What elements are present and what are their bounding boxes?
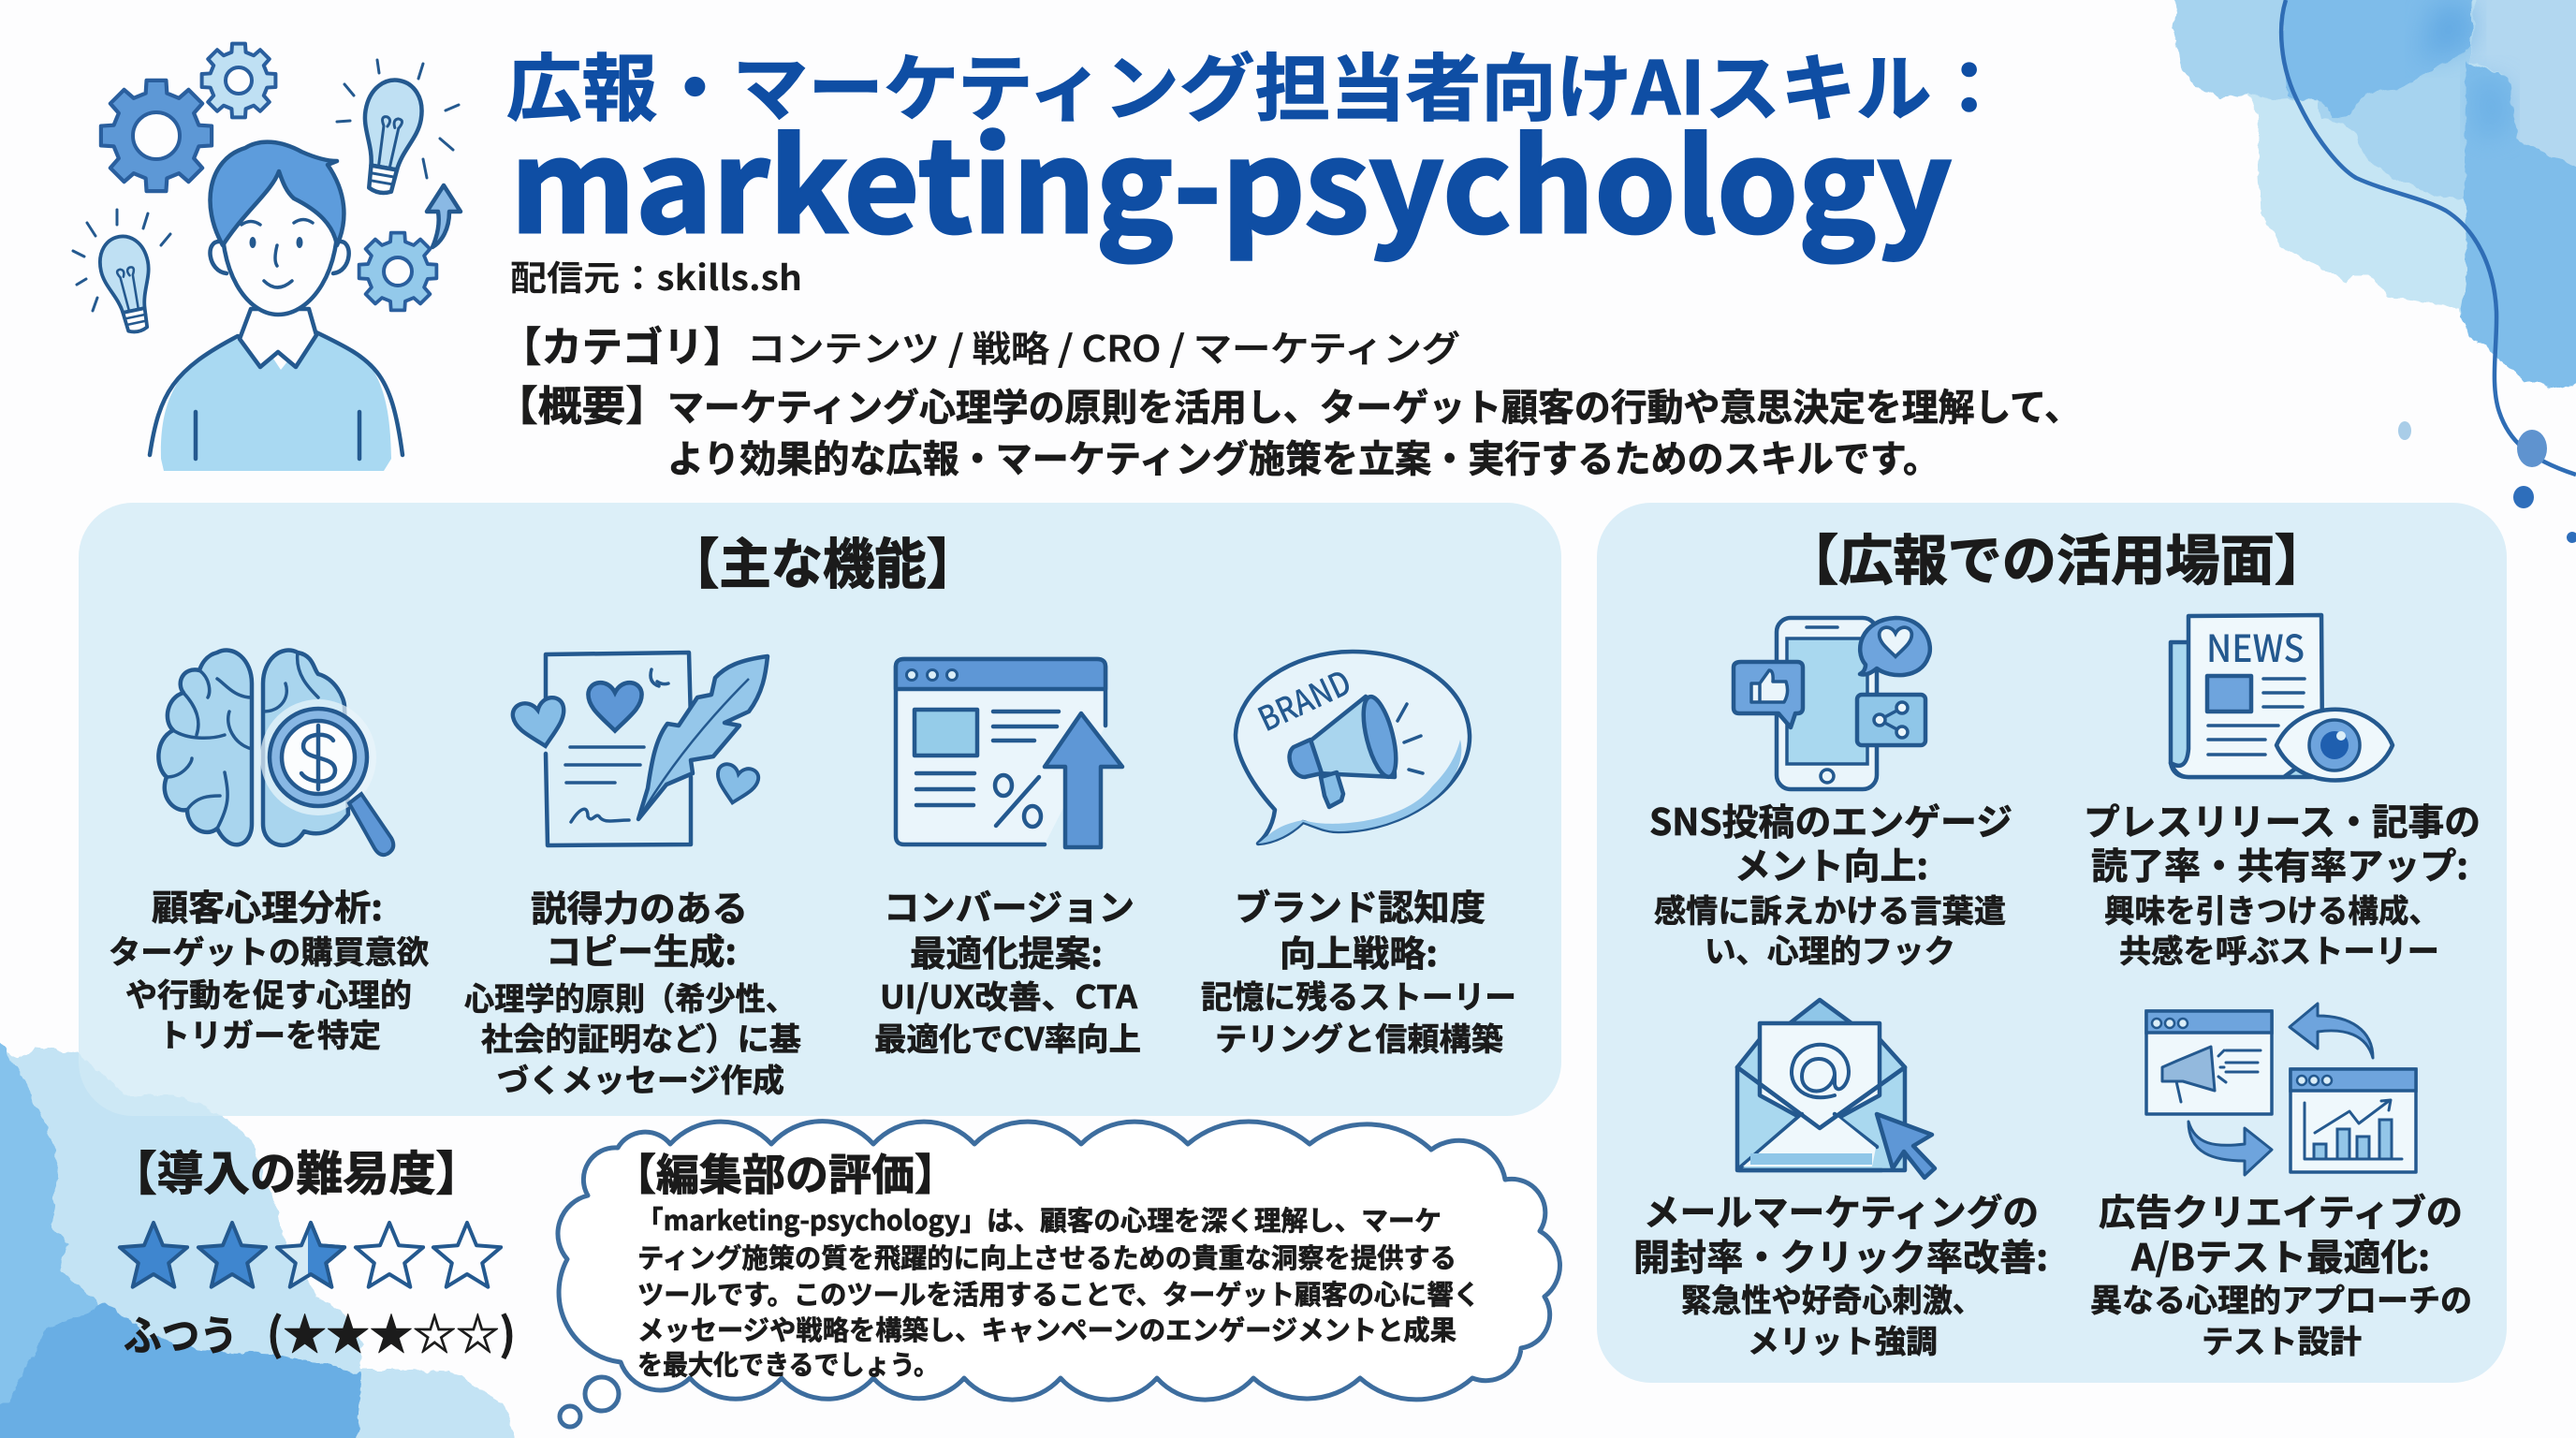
label: conversion optimization — [874, 879, 1141, 1060]
label: persuasive copy generation — [464, 880, 801, 1101]
label: press release reading rate: プレスリリース・記事の — [2084, 794, 2481, 846]
label: brand awareness strategy: ブランド認知度 — [1235, 879, 1486, 931]
icon: rays of right bulb — [337, 60, 459, 178]
label: customer psychology analysis: や行動を促す心理的 — [125, 970, 412, 1016]
label: brand awareness strategy — [1201, 879, 1516, 1060]
label: email marketing: 開封率・クリック率改善: — [1633, 1229, 2048, 1282]
label: email marketing: メールマーケティングの — [1644, 1184, 2039, 1237]
icon: smartphone with social bubbles — [1734, 618, 1930, 789]
icon: speech bubble with megaphone: BRAND — [1250, 656, 1358, 741]
icon: browser window with percent and up arrow — [896, 659, 1122, 847]
person ears — [211, 242, 349, 273]
person face details — [242, 219, 313, 287]
review body text: ティング施策の質を飛躍的に向上させるための貴重な洞察を提供する — [637, 1237, 1456, 1276]
category line: 【カテゴリ】 — [501, 314, 744, 374]
label: SNS engagement: 感情に訴えかける言葉遣 — [1654, 886, 2006, 932]
heading: main features: 【主な機能】 — [667, 521, 978, 599]
label: ad creative A/B test: 広告クリエイティブの — [2099, 1184, 2463, 1237]
label: conversion optimization: 最適化提案: — [910, 925, 1103, 976]
icon: newspaper with eye: NEWS — [2206, 619, 2305, 673]
icon: light bulb right — [352, 76, 427, 198]
icon: growth arrow — [427, 185, 461, 247]
illustration: person with gears and light bulbs — [73, 44, 461, 471]
label: conversion optimization: UI/UX改善、CTA — [880, 972, 1137, 1018]
overview text block: より効果的な広報・マーケティング施策を立案・実行するためのスキルです。 — [667, 429, 1939, 483]
title: skill name: marketing-psychology — [510, 85, 1952, 270]
review body text: ツールです。このツールを活用することで、ターゲット顧客の心に響く — [637, 1273, 1480, 1313]
person hair — [210, 142, 344, 245]
icon: A/B windows with arrows — [2146, 1004, 2416, 1175]
icon: rays of left bulb — [73, 210, 170, 311]
difficulty rating text: ふつう — [124, 1302, 238, 1362]
review body text: 「marketing-psychology」は、顧客の心理を深く理解し、マーケ — [637, 1199, 1442, 1239]
source line: 配信元：skills.sh — [510, 250, 802, 301]
label: conversion optimization: 最適化でCV率向上 — [874, 1014, 1141, 1060]
heading: PR use cases: 【広報での活用場面】 — [1784, 517, 2329, 595]
label: press release reading rate — [2084, 794, 2481, 972]
label: SNS engagement: SNS投稿のエンゲージ — [1649, 794, 2012, 846]
difficulty rating text — [124, 1299, 516, 1363]
overview text block: 【概要】 — [494, 373, 669, 433]
icon: newspaper with eye — [2171, 615, 2393, 781]
label: ad creative A/B test: テスト設計 — [2202, 1316, 2362, 1362]
label: ad creative A/B test: 異なる心理的アプローチの — [2090, 1275, 2472, 1321]
label: persuasive copy generation: づくメッセージ作成 — [497, 1055, 784, 1101]
panel: PR use cases — [1597, 503, 2507, 1383]
rating stars — [120, 1223, 501, 1287]
label: brand awareness strategy: 向上戦略: — [1280, 925, 1438, 976]
thought bubble: editorial review — [558, 1122, 1559, 1427]
overview text block — [494, 373, 2081, 483]
overview text block: マーケティング心理学の原則を活用し、ターゲット顧客の行動や意思決定を理解して、 — [667, 377, 2081, 432]
heading: editorial review: 【編集部の評価】 — [613, 1141, 958, 1203]
label: SNS engagement — [1649, 794, 2012, 972]
label: press release reading rate: 共感を呼ぶストーリー — [2119, 926, 2439, 972]
label: SNS engagement: い、心理的フック — [1705, 926, 1955, 972]
review body text — [637, 1199, 1480, 1383]
label: ad creative A/B test: A/Bテスト最適化: — [2130, 1229, 2430, 1282]
label: email marketing: メリット強調 — [1748, 1316, 1938, 1362]
label: persuasive copy generation: 社会的証明など）に基 — [481, 1014, 801, 1060]
icon: open envelope with cursor — [1737, 1000, 1935, 1178]
category line: コンテンツ / 戦略 / CRO / マーケティング — [747, 320, 1460, 372]
label: ad creative A/B test — [2090, 1184, 2472, 1362]
label: persuasive copy generation: 説得力のある — [531, 880, 748, 932]
label: press release reading rate: 興味を引きつける構成、 — [2104, 886, 2439, 932]
icon: speech bubble with megaphone — [1236, 652, 1470, 844]
label: persuasive copy generation: 心理学的原則（希少性、 — [464, 974, 796, 1020]
icon: light bulb left — [95, 232, 162, 336]
title: first line: 広報・マーケティング担当者向けAIスキル： — [506, 31, 2007, 136]
watercolor: top right — [2174, 0, 2576, 389]
label: email marketing — [1633, 1184, 2048, 1362]
icon: gear lower right — [359, 233, 436, 310]
difficulty rating text: (★★★☆☆) — [267, 1299, 516, 1363]
person neck and collar — [240, 309, 316, 367]
person face — [222, 170, 338, 315]
category line — [501, 314, 1460, 374]
review body text: を最大化できるでしょう。 — [637, 1343, 939, 1383]
decorative curve and droplets — [2281, 0, 2576, 543]
label: brand awareness strategy: テリングと信頼構築 — [1215, 1014, 1503, 1060]
label: customer psychology analysis: トリガーを特定 — [158, 1010, 381, 1056]
icon: document and feather — [511, 653, 768, 845]
label: press release reading rate: 読了率・共有率アップ: — [2091, 838, 2468, 890]
difficulty block — [110, 1137, 516, 1363]
label: brand awareness strategy: 記憶に残るストーリー — [1201, 972, 1516, 1018]
person body — [161, 333, 391, 471]
icon: brain with magnifier — [158, 651, 393, 855]
icon: large gear — [101, 81, 212, 191]
label: email marketing: 緊急性や好奇心刺激、 — [1681, 1275, 1983, 1321]
icon: small gear top — [202, 44, 275, 117]
label: customer psychology analysis — [109, 879, 429, 1056]
label: persuasive copy generation: コピー生成: — [546, 923, 737, 975]
review body text: メッセージや戦略を構築し、キャンペーンのエンゲージメントと成果 — [637, 1309, 1456, 1348]
bubble tail circles — [560, 1377, 619, 1427]
panel: main features — [79, 503, 1561, 1116]
label: customer psychology analysis: ターゲットの購買意欲 — [109, 927, 429, 973]
watercolor: bottom left — [0, 1042, 524, 1438]
label: customer psychology analysis: 顧客心理分析: — [152, 879, 383, 931]
heading: difficulty: 【導入の難易度】 — [110, 1137, 482, 1204]
label: SNS engagement: メント向上: — [1734, 838, 1928, 890]
label: conversion optimization: コンバージョン — [884, 879, 1134, 931]
